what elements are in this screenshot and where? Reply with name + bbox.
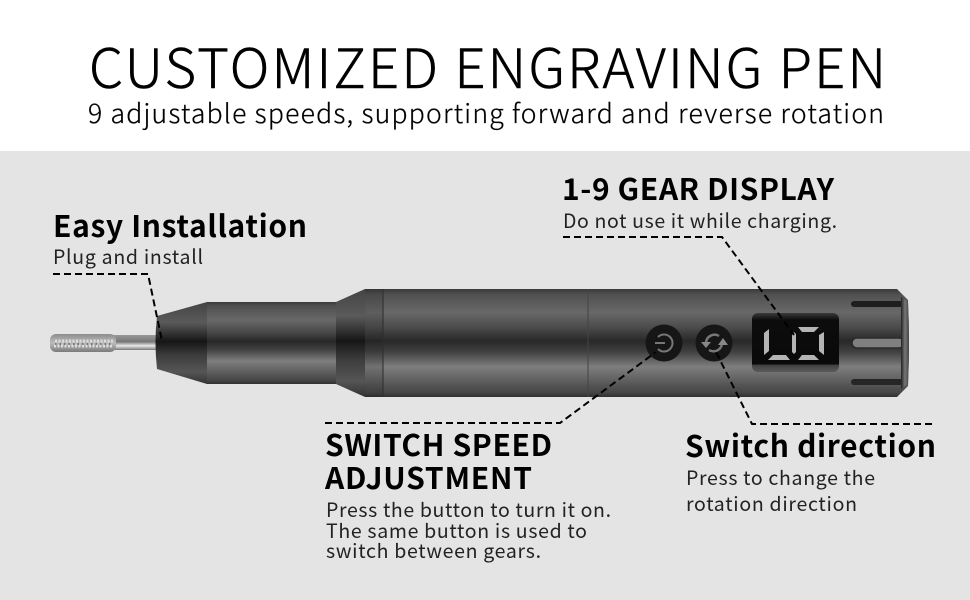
LED display (752, 313, 839, 372)
subtitle: 9 adjustable speeds, supporting forward and reverse rotation (88, 92, 884, 131)
leader line: easy installation (53, 274, 162, 341)
leader line: switch direction (716, 352, 932, 424)
text: plug and install: Plug and install (53, 241, 203, 270)
pen shoulder (336, 289, 384, 397)
callout: gear display (562, 165, 837, 335)
pen end grooves (851, 301, 904, 385)
heading: switch speed adjustment: SWITCH SPEED (325, 421, 552, 465)
callout: switch speed adjustment (324, 352, 656, 564)
heading: switch direction: Switch direction (685, 422, 936, 466)
text: switch instructions: Press the button to turn it on. (326, 494, 611, 523)
heading: gear display: 1-9 GEAR DISPLAY (562, 165, 835, 209)
pen nose cone (156, 302, 207, 384)
callout: switch speed adjustment: The same button is used to (326, 515, 587, 544)
power button (646, 324, 682, 362)
heading: easy installation: Easy Installation (53, 202, 307, 246)
callout: switch speed adjustment: switch between gears. (326, 535, 541, 564)
pen bit (50, 334, 157, 352)
callout: switch direction (685, 352, 936, 517)
engraving pen (50, 289, 909, 397)
panel: grey background (0, 151, 970, 600)
pen barrel (365, 289, 909, 397)
callout: switch direction: rotation direction (686, 488, 857, 517)
leader line: switch speed (325, 352, 656, 423)
text: do not use while charging: Do not use it while charging. (563, 205, 837, 234)
callout: switch speed adjustment: ADJUSTMENT (324, 454, 532, 498)
leader line: gear display (563, 237, 794, 335)
direction button (696, 324, 732, 362)
text: direction instructions: Press to change the (686, 462, 875, 491)
pen neck (207, 302, 337, 384)
pen end cap (901, 297, 909, 389)
title: CUSTOMIZED ENGRAVING PEN (89, 25, 886, 104)
callout: easy installation (53, 202, 307, 341)
